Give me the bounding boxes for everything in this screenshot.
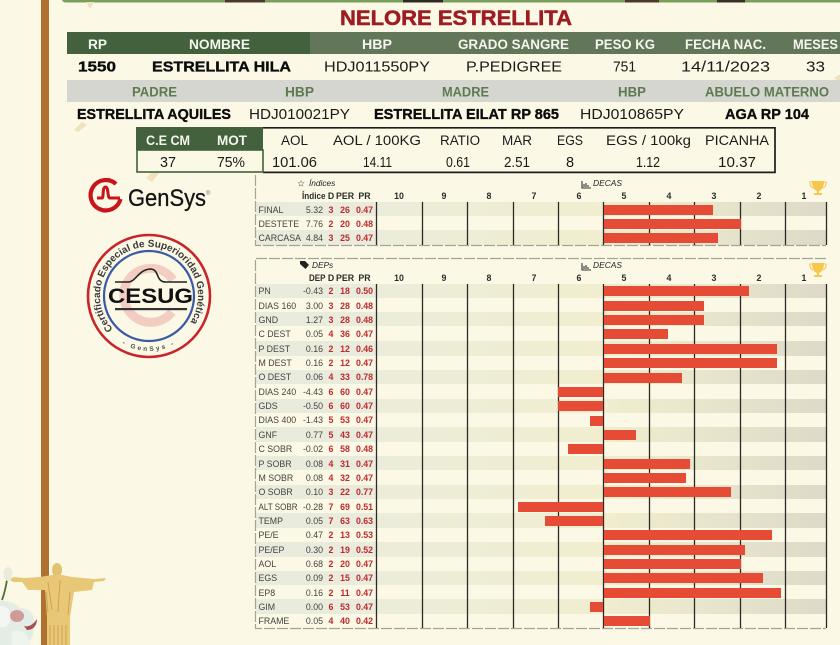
row: O DEST: 0.78 — [356, 372, 373, 382]
badge: CESUG seal: CESUG — [108, 285, 193, 308]
row: O SOBR: 0.10 — [306, 487, 323, 497]
row: EP8: 11 — [340, 588, 350, 598]
row: FRAME: 4 — [329, 616, 334, 626]
column headers: 9 — [442, 191, 447, 201]
row: ALT SOBR: -0.28 — [303, 502, 323, 512]
metrics box: PICANHA — [705, 133, 769, 148]
pedigree values row: ESTRELLITA AQUILES — [77, 106, 231, 123]
row: GNF: 0.47 — [356, 430, 373, 440]
metrics box: 1.12 — [636, 155, 660, 171]
row: TEMP: TEMP — [258, 516, 283, 526]
row: P DEST: 0.46 — [356, 344, 373, 354]
row: EP8: 0.47 — [356, 588, 373, 598]
row: DIAS 240: DIAS 240 — [258, 387, 296, 397]
heading: Índices — [297, 178, 335, 188]
row: C SOBR: -0.02 — [303, 444, 323, 454]
row: C DEST: C DEST — [258, 329, 291, 339]
row: FRAME: 0.05 — [306, 616, 323, 626]
row: TEMP: 0.63 — [356, 516, 373, 526]
row: P SOBR: 4 — [329, 459, 334, 469]
row: M SOBR — [258, 473, 686, 483]
metrics box: C.E CM — [146, 133, 190, 148]
row: EGS — [258, 573, 763, 583]
header bar: animal fields: GRADO SANGRE — [458, 37, 569, 52]
row: GIM: GIM — [258, 602, 275, 612]
pedigree header bar: PADRE — [132, 84, 177, 100]
pedigree header bar: MADRE — [442, 84, 489, 100]
row: GND: 28 — [340, 315, 350, 325]
row: C DEST: 4 — [329, 329, 334, 339]
row: M DEST: 2 — [329, 358, 334, 368]
metrics box: MOT — [217, 133, 248, 148]
row: DIAS 400 — [258, 415, 603, 426]
column headers: PER — [336, 273, 355, 283]
pedigree values row: HDJ010865PY — [580, 106, 684, 123]
row: DIAS 160: 3 — [329, 301, 334, 311]
frame — [256, 258, 826, 628]
logo: GenSys — [91, 180, 211, 212]
animal values row: 14/11/2023 — [681, 58, 770, 76]
badge: CESUG seal: Certificado Especial de Superioridad Genética — [93, 240, 204, 332]
header bar: animal fields: MESES — [793, 37, 838, 52]
header bar: animal fields: HBP — [362, 37, 392, 52]
metrics box: 8 — [566, 155, 574, 171]
row: PN: 18 — [340, 286, 350, 296]
header bar: animal fields: FECHA NAC. — [685, 37, 766, 52]
column headers: 4 — [667, 273, 672, 283]
row: GNF: 5 — [329, 430, 334, 440]
row: CARCASA — [258, 233, 718, 243]
metrics box: RATIO — [440, 133, 480, 148]
decorative brown vertical bar — [41, 0, 49, 645]
logo: GenSys: GenSys — [128, 185, 206, 212]
row: C SOBR: 58 — [340, 444, 350, 454]
badge: CESUG seal: - GenSys - — [122, 342, 173, 352]
row: GND: 3 — [329, 315, 334, 325]
faint leaf marks — [74, 2, 840, 182]
row: CARCASA: CARCASA — [258, 233, 301, 243]
column headers: 6 — [577, 273, 582, 283]
row: GNF: GNF — [258, 430, 278, 440]
row: EP8: 0.16 — [306, 588, 323, 598]
row: DESTETE: 2 — [329, 219, 334, 229]
row: DIAS 160: 28 — [340, 301, 350, 311]
row: GDS: GDS — [258, 401, 278, 411]
row: C SOBR: 6 — [329, 444, 334, 454]
metrics box: AOL / 100KG — [333, 133, 421, 148]
row: C DEST — [258, 329, 668, 339]
column headers: 7 — [532, 191, 537, 201]
row: O DEST: O DEST — [258, 372, 292, 382]
row: PN: PN — [258, 286, 271, 296]
row: M DEST: 0.47 — [356, 358, 373, 368]
row: ALT SOBR: 0.51 — [356, 502, 373, 512]
row: M SOBR: 32 — [340, 473, 350, 483]
logo: GenSys: ® — [206, 190, 211, 197]
row: CARCASA: 4.84 — [306, 233, 323, 243]
animal values row: 1550 — [78, 58, 116, 76]
row: DIAS 400: DIAS 400 — [258, 415, 296, 425]
column headers: 3 — [712, 191, 717, 201]
row: DIAS 160 — [258, 301, 704, 311]
row: AOL: 0.47 — [356, 559, 373, 569]
row: GDS — [258, 401, 603, 411]
column headers: PER — [336, 191, 355, 201]
header bar: animal fields — [67, 32, 840, 54]
column headers: 3 — [712, 273, 717, 283]
row: AOL — [258, 559, 741, 569]
row: PN: -0.43 — [303, 286, 323, 296]
pedigree header bar: ABUELO MATERNO — [705, 84, 829, 100]
pedigree values row: ESTRELLITA EILAT RP 865 — [374, 106, 559, 123]
column headers: PR — [358, 273, 371, 283]
row: EGS: 0.47 — [356, 573, 373, 583]
row: PE/EP: 19 — [340, 545, 350, 555]
heading: Índices: Índices — [309, 178, 335, 188]
metrics box: AOL — [281, 133, 308, 148]
row: EP8: 2 — [329, 588, 334, 598]
row: GND — [258, 315, 704, 325]
row: DIAS 240: 6 — [329, 387, 334, 397]
row: TEMP: 7 — [329, 516, 334, 526]
row: PE/E: PE/E — [258, 530, 279, 540]
heading: Decas: DECAS — [593, 260, 622, 270]
pedigree header bar — [67, 80, 840, 102]
row: P DEST — [258, 344, 777, 354]
column headers: 9 — [442, 273, 447, 283]
column headers: PR — [358, 191, 371, 201]
row: GND: GND — [258, 315, 278, 325]
row: PN: 0.50 — [356, 286, 373, 296]
row: DESTETE: DESTETE — [258, 219, 299, 229]
row: O DEST: 4 — [329, 372, 334, 382]
row: C DEST: 0.05 — [306, 329, 323, 339]
row: M DEST: M DEST — [258, 358, 292, 368]
column headers — [309, 273, 807, 283]
column headers: 4 — [667, 191, 672, 201]
row: M SOBR: 0.47 — [356, 473, 373, 483]
row: AOL: AOL — [258, 559, 276, 569]
column headers: DEP — [309, 273, 326, 283]
animal values row: ESTRELLITA HILA — [152, 58, 291, 76]
row: C DEST: 0.47 — [356, 329, 373, 339]
row: GDS: 0.47 — [356, 401, 373, 411]
row: FINAL — [258, 205, 713, 215]
row: ALT SOBR: 69 — [340, 502, 350, 512]
row: FRAME — [258, 616, 650, 626]
row: GND: 1.27 — [306, 315, 323, 325]
column headers: 2 — [757, 273, 762, 283]
row: PE/EP: 0.52 — [356, 545, 373, 555]
animal values row: HDJ011550PY — [324, 58, 430, 76]
badge: CESUG seal — [86, 234, 212, 358]
row: GIM: 0.47 — [356, 602, 373, 612]
row: DESTETE: 7.76 — [306, 219, 323, 229]
chart: Índices table — [256, 175, 826, 246]
metrics box: MAR — [502, 133, 532, 148]
pedigree values row — [77, 106, 810, 123]
row: M DEST: 12 — [340, 358, 350, 368]
animal values row — [78, 58, 825, 76]
title: NELORE ESTRELLITA — [340, 7, 572, 30]
row: AOL: 2 — [329, 559, 334, 569]
row: DIAS 400: 5 — [329, 415, 334, 425]
row: EP8 — [258, 588, 781, 598]
column headers: Índice — [302, 191, 326, 201]
column headers: 1 — [802, 191, 807, 201]
column headers: 5 — [622, 273, 627, 283]
row: EGS: EGS — [258, 573, 277, 583]
row: DIAS 240 — [258, 387, 603, 397]
row: GIM: 6 — [329, 602, 334, 612]
row: FRAME: 0.42 — [356, 616, 373, 626]
pedigree header bar: HBP — [285, 84, 314, 100]
metrics box: 2.51 — [504, 155, 530, 171]
column headers — [302, 191, 807, 201]
column headers: 6 — [577, 191, 582, 201]
row: GIM: 0.00 — [306, 602, 323, 612]
row: PN — [258, 286, 749, 296]
row: DIAS 160: 0.48 — [356, 301, 373, 311]
row: P SOBR: 31 — [340, 459, 350, 469]
row: FINAL: 0.47 — [356, 205, 373, 215]
metrics box: 10.37 — [718, 155, 756, 171]
row: AOL: 0.68 — [306, 559, 323, 569]
row: M DEST — [258, 358, 777, 368]
row: O SOBR: 22 — [340, 487, 350, 497]
column headers: D — [328, 191, 334, 201]
animal values row: 751 — [613, 58, 636, 76]
row: PE/EP — [258, 545, 745, 555]
heading: Índices: ☆ — [297, 178, 305, 188]
row: GNF: 43 — [340, 430, 350, 440]
row: C SOBR: C SOBR — [258, 444, 292, 454]
grid lines — [376, 284, 826, 628]
illustration: white flower — [0, 567, 37, 645]
row: GDS: -0.50 — [303, 401, 323, 411]
grid lines — [376, 202, 826, 245]
row: TEMP: 0.05 — [306, 516, 323, 526]
row: P SOBR: 0.47 — [356, 459, 373, 469]
top photo strip — [62, 0, 840, 2]
row: P DEST: P DEST — [258, 344, 291, 354]
row: CARCASA: 25 — [340, 233, 350, 243]
row: ALT SOBR — [258, 502, 603, 512]
row: DIAS 400: 0.47 — [356, 415, 373, 425]
row: DIAS 160: 3.00 — [306, 301, 323, 311]
metrics box: 37 — [160, 155, 176, 171]
row: EGS: 0.09 — [306, 573, 323, 583]
row stripes — [256, 202, 826, 245]
heading: Decas: DECAS — [593, 178, 622, 188]
metrics box: 14.11 — [363, 155, 392, 171]
row stripes — [256, 284, 826, 614]
row: GNF: 0.77 — [306, 430, 323, 440]
row: DIAS 240: 60 — [340, 387, 350, 397]
illustration: Christ statue — [9, 563, 106, 645]
column headers: 1 — [802, 273, 807, 283]
heading: DEPs — [300, 260, 333, 270]
row: PE/EP: PE/EP — [258, 545, 285, 555]
row: O SOBR: O SOBR — [258, 487, 293, 497]
row: PE/E: 13 — [340, 530, 350, 540]
pedigree values row: HDJ010021PY — [249, 106, 350, 123]
row: P DEST: 2 — [329, 344, 334, 354]
row: O DEST — [258, 372, 682, 383]
row: FINAL: 3 — [329, 205, 334, 215]
metrics box: 0.61 — [446, 155, 470, 171]
column headers: 10 — [394, 273, 404, 283]
row: DIAS 160: DIAS 160 — [258, 301, 296, 311]
column headers: 2 — [757, 191, 762, 201]
row: C SOBR — [258, 444, 603, 454]
metrics box: EGS — [557, 133, 583, 148]
metrics box — [136, 127, 775, 172]
row: GNF — [258, 430, 636, 440]
row: M SOBR: 0.08 — [306, 473, 323, 483]
pedigree header bar: HBP — [618, 84, 646, 100]
metrics box: 75% — [217, 155, 245, 171]
row: PE/E: 0.53 — [356, 530, 373, 540]
icon: trophy — [810, 263, 826, 277]
row: P SOBR: 0.08 — [306, 459, 323, 469]
row: M SOBR: M SOBR — [258, 473, 293, 483]
row: FINAL: 5.32 — [306, 205, 323, 215]
row: O SOBR — [258, 487, 731, 497]
row: ALT SOBR: 7 — [329, 502, 334, 512]
row: GDS: 60 — [340, 401, 350, 411]
row: FRAME: FRAME — [258, 616, 289, 626]
row: P DEST: 12 — [340, 344, 350, 354]
header bar: animal fields: NOMBRE — [189, 37, 250, 52]
row: GIM — [258, 602, 603, 612]
row: GIM: 53 — [340, 602, 350, 612]
icon: trophy — [810, 181, 826, 195]
row: EGS: 2 — [329, 573, 334, 583]
row: PE/E: 0.47 — [306, 530, 323, 540]
row: GDS: 6 — [329, 401, 334, 411]
row: P SOBR — [258, 459, 690, 469]
row: PN: 2 — [329, 286, 334, 296]
row: P DEST: 0.16 — [306, 344, 323, 354]
row: DIAS 240: 0.47 — [356, 387, 373, 397]
chart: DEPs table — [256, 258, 826, 628]
row: DESTETE: 20 — [340, 219, 350, 229]
header bar: animal fields: RP — [88, 37, 107, 52]
row: CARCASA: 3 — [329, 233, 334, 243]
row: DIAS 400: 53 — [340, 415, 350, 425]
row: FRAME: 40 — [340, 616, 350, 626]
column headers: 8 — [487, 191, 492, 201]
row: EGS: 15 — [340, 573, 350, 583]
row: O DEST: 33 — [340, 372, 350, 382]
row: ALT SOBR: ALT SOBR — [258, 502, 298, 512]
row: PE/E — [258, 530, 772, 540]
column headers: 5 — [622, 191, 627, 201]
row: CARCASA: 0.47 — [356, 233, 373, 243]
row: M DEST: 0.16 — [306, 358, 323, 368]
row: P SOBR: P SOBR — [258, 459, 292, 469]
row: PE/E: 2 — [329, 530, 334, 540]
animal values row: 33 — [806, 58, 825, 76]
animal values row: P.PEDIGREE — [466, 58, 562, 76]
row: PE/EP: 2 — [329, 545, 334, 555]
column headers: 8 — [487, 273, 492, 283]
row: GND: 0.48 — [356, 315, 373, 325]
pedigree values row: AGA RP 104 — [725, 106, 810, 123]
row: O SOBR: 3 — [329, 487, 334, 497]
row: TEMP — [258, 516, 603, 526]
header bar: animal fields: PESO KG — [595, 37, 655, 52]
row: DESTETE: 0.48 — [356, 219, 373, 229]
metrics box: 101.06 — [272, 155, 317, 171]
row: EP8: EP8 — [258, 588, 275, 598]
row: DESTETE — [258, 219, 741, 229]
column headers: D — [328, 273, 334, 283]
row: FINAL: FINAL — [258, 205, 284, 215]
row: M SOBR: 4 — [329, 473, 334, 483]
row: PE/EP: 0.30 — [306, 545, 323, 555]
metrics box: EGS / 100kg — [606, 133, 691, 148]
frame — [256, 175, 826, 246]
row: TEMP: 63 — [340, 516, 350, 526]
column headers: 10 — [394, 191, 404, 201]
row: C DEST: 36 — [340, 329, 350, 339]
row: FINAL: 26 — [340, 205, 350, 215]
column headers: 7 — [532, 273, 537, 283]
row: DIAS 240: -4.43 — [303, 387, 323, 397]
row: AOL: 20 — [340, 559, 350, 569]
row: DIAS 400: -1.43 — [303, 415, 323, 425]
row: O SOBR: 0.77 — [356, 487, 373, 497]
row: C SOBR: 0.48 — [356, 444, 373, 454]
heading: DEPs: DEPs — [312, 260, 333, 270]
row: O DEST: 0.06 — [306, 372, 323, 382]
